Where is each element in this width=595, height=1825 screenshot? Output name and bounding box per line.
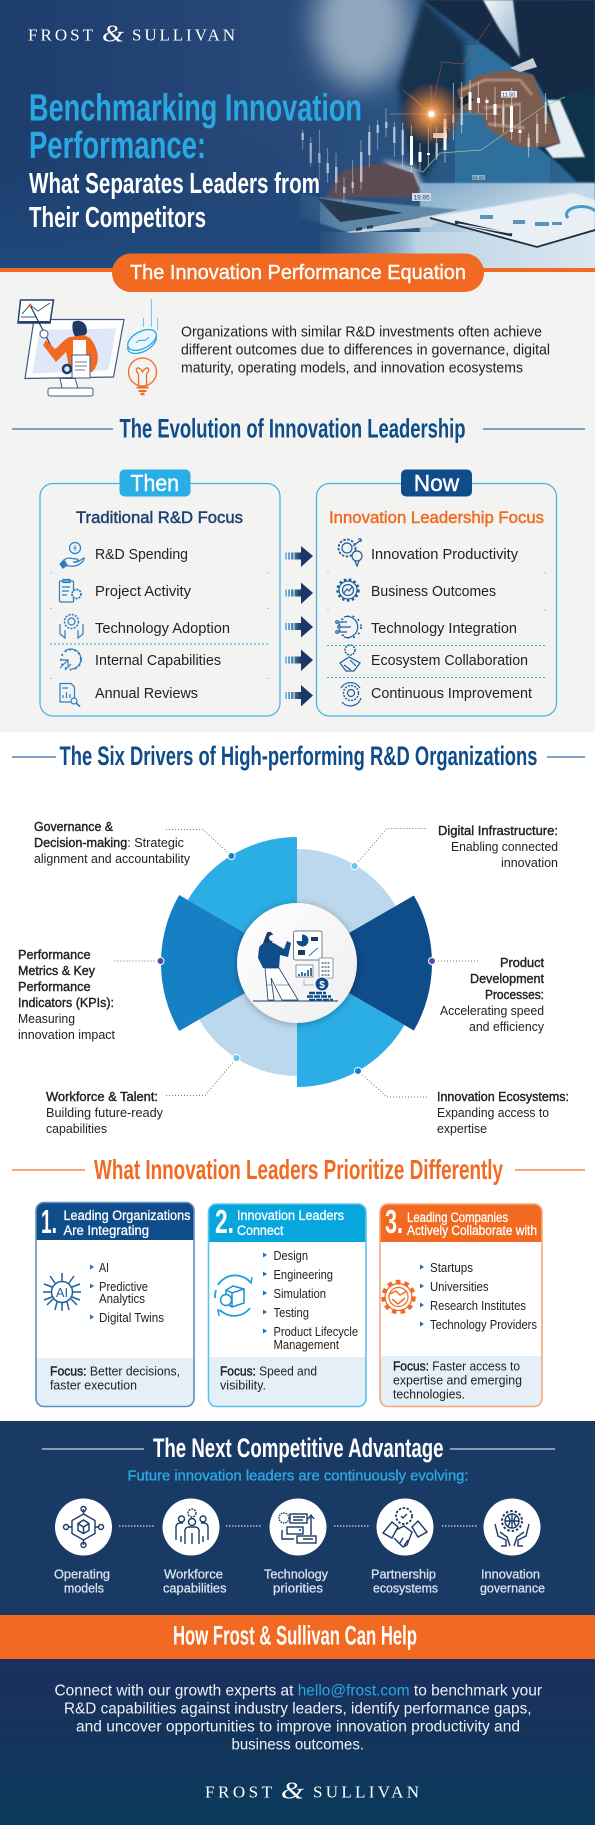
panel: now: Technology Integration xyxy=(371,620,517,637)
card 1: integrating: 1. xyxy=(41,1203,57,1240)
item: operating models xyxy=(54,1498,112,1596)
arrow 1 xyxy=(285,546,313,567)
label: innovation ecosystems: expertise xyxy=(437,1121,487,1136)
icon: project xyxy=(60,580,81,602)
label: governance: alignment and accountability xyxy=(34,851,190,866)
label: governance xyxy=(34,819,190,866)
equation pill heading: The Innovation Performance Equation xyxy=(130,262,466,284)
contact text: R&D capabilities against industry leaders, identify performance gaps, xyxy=(64,1700,532,1718)
card 3: collaborate: technologies. xyxy=(393,1386,465,1402)
list: Startups xyxy=(430,1260,473,1275)
label: digital infrastructure: Enabling connected xyxy=(451,839,558,854)
chart value labels: 11.50 xyxy=(502,92,515,98)
panel: then: Technology Adoption xyxy=(95,620,230,637)
hero photo banner xyxy=(0,0,595,270)
title: Benchmarking Innovation xyxy=(29,88,362,130)
label: governance: Governance & xyxy=(34,819,113,834)
badge: now: Now xyxy=(414,470,460,496)
list xyxy=(90,1260,164,1325)
contact text: Connect with our growth experts at hello@frost.com to benchmark your xyxy=(54,1682,542,1700)
connector: performance xyxy=(113,958,164,964)
label: innovation ecosystems: Innovation Ecosystems: xyxy=(437,1089,569,1104)
item: workforce capabilities: Workforce xyxy=(164,1566,223,1582)
label: performance metrics: Performance xyxy=(18,947,90,962)
panel: next competitive advantage xyxy=(0,1421,595,1615)
card 2: connect: Connect xyxy=(237,1223,284,1238)
list: Digital Twins xyxy=(99,1310,164,1325)
connector: digital xyxy=(351,828,427,870)
panel: then: Internal Capabilities xyxy=(95,652,221,669)
item: innovation governance: governance xyxy=(480,1580,545,1596)
icon: light bulb xyxy=(128,358,156,394)
title xyxy=(29,88,362,234)
card 3: collaborate xyxy=(380,1203,542,1406)
list: Predictive xyxy=(99,1279,148,1294)
list: Simulation xyxy=(274,1286,326,1301)
arrow 2 xyxy=(285,582,313,604)
logo bottom xyxy=(205,1778,419,1804)
panel: now: Innovation Productivity xyxy=(371,546,518,563)
item: operating models: models xyxy=(64,1580,104,1596)
title: Their Competitors xyxy=(29,202,206,234)
list xyxy=(263,1248,358,1352)
item: technology priorities: priorities xyxy=(273,1580,324,1596)
label: performance metrics: innovation impact xyxy=(18,1027,115,1042)
icon: capabilities xyxy=(60,649,81,670)
chart value labels: 64.03 xyxy=(472,176,484,180)
item: innovation governance: Innovation xyxy=(481,1566,540,1582)
illustration: analyst with charts xyxy=(253,931,338,1001)
panel: now xyxy=(316,470,556,716)
item: technology priorities: Technology xyxy=(264,1566,328,1582)
label: governance: Decision-making: Strategic xyxy=(34,835,184,850)
list: Product Lifecycle xyxy=(274,1324,358,1339)
icon: continuous improvement xyxy=(341,683,361,706)
item: workforce capabilities: capabilities xyxy=(163,1580,227,1596)
card 2: connect: 2. xyxy=(215,1203,234,1240)
segment: workforce xyxy=(199,963,297,1076)
chart value labels xyxy=(412,91,517,202)
badge: then: Then xyxy=(130,470,179,496)
card 3: collaborate: Leading Companies xyxy=(407,1210,508,1225)
list xyxy=(420,1260,537,1332)
panel: how frost and sullivan can help xyxy=(0,1615,595,1825)
card 2: connect: Focus: Speed and xyxy=(220,1364,317,1378)
item: partnership ecosystems: ecosystems xyxy=(373,1580,438,1596)
label: performance metrics: Indicators (KPIs): xyxy=(18,995,114,1010)
connector: governance xyxy=(164,830,235,860)
icon: AI chip: AI xyxy=(56,1285,68,1300)
logo bottom: FROST xyxy=(205,1782,273,1802)
card 3: collaborate: expertise and emerging xyxy=(393,1372,522,1388)
icon: partnership gear xyxy=(384,1282,414,1312)
label: workforce: Building future-ready xyxy=(46,1105,163,1120)
arrow 4 xyxy=(285,650,313,671)
item: workforce capabilities xyxy=(162,1498,227,1596)
panel: then: Traditional R&D Focus xyxy=(76,509,243,527)
arrows: then to now xyxy=(285,546,313,706)
label: product development: and efficiency xyxy=(469,1019,544,1034)
illustration: presenter at monitor xyxy=(18,300,124,396)
card 1: integrating: Leading Organizations xyxy=(64,1208,191,1223)
list: Design xyxy=(274,1248,308,1263)
chart: six drivers radial xyxy=(113,828,480,1097)
icon: product cycle xyxy=(215,1275,252,1316)
arrow 3 xyxy=(285,616,313,638)
panel: innovation performance equation xyxy=(0,268,595,732)
list: Technology Providers xyxy=(430,1317,537,1332)
contact text xyxy=(54,1682,542,1754)
card 1: integrating xyxy=(36,1202,194,1406)
icon: business outcomes xyxy=(338,580,358,600)
panel: now: Business Outcomes xyxy=(371,583,496,600)
label: product development: Accelerating speed xyxy=(440,1003,544,1018)
panel: then: Annual Reviews xyxy=(95,685,198,702)
panel: now: Innovation Leadership Focus xyxy=(329,509,544,527)
segment: digital infrastructure xyxy=(297,849,396,963)
intro text: different outcomes due to differences in governance, digital xyxy=(181,342,550,358)
card 2: connect: Innovation Leaders xyxy=(237,1208,344,1223)
segment: product development xyxy=(297,896,432,1030)
label: workforce: Workforce & Talent: xyxy=(46,1089,158,1104)
card 2: connect xyxy=(208,1203,366,1406)
card 1: integrating: Focus: Better decisions, xyxy=(50,1364,180,1378)
list: Engineering xyxy=(274,1267,333,1282)
logo top: SULLIVAN xyxy=(132,26,235,44)
panel: then: Project Activity xyxy=(95,583,191,600)
label: digital infrastructure xyxy=(438,823,558,870)
item: operating models: Operating xyxy=(54,1566,110,1582)
logo top xyxy=(28,22,235,48)
label: product development: Processes: xyxy=(485,987,544,1002)
icon: reviews xyxy=(60,684,80,706)
card 2: connect: visibility. xyxy=(220,1378,266,1392)
connector: ecosystems xyxy=(354,1068,427,1097)
item: partnership ecosystems xyxy=(371,1498,438,1596)
icon: innovation productivity xyxy=(338,539,362,566)
badge: now xyxy=(401,470,472,496)
intro text: maturity, operating models, and innovation ecosystems xyxy=(181,360,523,376)
icon: coin xyxy=(124,299,160,358)
panel: next competitive advantage: Future innovation leaders are continuously evolving: xyxy=(128,1468,468,1484)
panel: then xyxy=(40,470,280,716)
segment: innovation ecosystems xyxy=(297,963,404,1087)
logo bottom: SULLIVAN xyxy=(313,1782,419,1802)
list: Testing xyxy=(274,1305,309,1320)
intro text: Organizations with similar R&D investments often achieve xyxy=(181,324,542,340)
item: technology priorities xyxy=(264,1498,328,1596)
heading: next competitive advantage: The Next Competitive Advantage xyxy=(153,1433,444,1463)
label: digital infrastructure: Digital Infrastructure: xyxy=(438,823,558,838)
icon: spending xyxy=(60,542,84,568)
label: performance metrics: Performance xyxy=(18,979,90,994)
contact text: and uncover opportunities to improve innovation productivity and xyxy=(76,1718,520,1736)
center circle xyxy=(237,903,357,1023)
list: AI xyxy=(99,1260,109,1275)
label: workforce: capabilities xyxy=(46,1121,107,1136)
label: product development: Development xyxy=(470,971,544,986)
list: Management xyxy=(274,1337,339,1352)
label: innovation ecosystems: Expanding access to xyxy=(437,1105,549,1120)
icon: ecosystem collaboration xyxy=(340,645,360,671)
list: Research Institutes xyxy=(430,1298,526,1313)
label: innovation ecosystems xyxy=(437,1089,569,1136)
title: Performance: xyxy=(29,125,206,167)
logo top: & xyxy=(102,22,124,48)
illustration: analyst with charts: $ xyxy=(319,980,325,991)
title: What Separates Leaders from xyxy=(29,168,320,200)
contact text: business outcomes. xyxy=(232,1736,364,1754)
panel: now: Ecosystem Collaboration xyxy=(371,652,528,669)
logo top: FROST xyxy=(28,26,94,44)
item: partnership ecosystems: Partnership xyxy=(371,1566,436,1582)
arrow 5 xyxy=(285,685,313,706)
logo bottom: & xyxy=(281,1778,304,1804)
heading band: How Frost & Sullivan Can Help xyxy=(173,1620,417,1650)
card 1: integrating: Are Integrating xyxy=(64,1223,149,1238)
label: workforce xyxy=(46,1089,163,1136)
list: Analytics xyxy=(99,1291,145,1306)
label: product development: Product xyxy=(500,955,544,970)
item: innovation governance xyxy=(480,1498,545,1596)
card 3: collaborate: Focus: Faster access to xyxy=(393,1358,520,1374)
icon: tech adoption xyxy=(60,614,83,638)
candlestick chart xyxy=(302,80,547,203)
panel: then: R&D Spending xyxy=(95,546,188,563)
segment: governance xyxy=(188,837,297,963)
panel: now: Continuous Improvement xyxy=(371,685,533,702)
label: digital infrastructure: innovation xyxy=(501,855,558,870)
icon: technology integration xyxy=(336,616,361,638)
label: performance metrics xyxy=(18,947,115,1042)
card 3: collaborate: 3. xyxy=(385,1203,403,1240)
label: performance metrics: Metrics & Key xyxy=(18,963,95,978)
segment: performance metrics xyxy=(161,895,297,1031)
connector: product xyxy=(428,958,480,964)
equation pill heading xyxy=(112,254,484,292)
list: Universities xyxy=(430,1279,489,1294)
card 1: integrating: faster execution xyxy=(50,1378,137,1392)
icon: AI chip xyxy=(43,1273,81,1311)
card 3: collaborate: Actively Collaborate with xyxy=(407,1223,537,1238)
label: performance metrics: Measuring xyxy=(18,1011,75,1026)
chart value labels: 19.95 xyxy=(414,194,430,202)
connector: workforce xyxy=(165,1054,240,1096)
intro text xyxy=(181,324,550,376)
label: product development xyxy=(440,955,544,1034)
heading band xyxy=(0,1615,595,1659)
